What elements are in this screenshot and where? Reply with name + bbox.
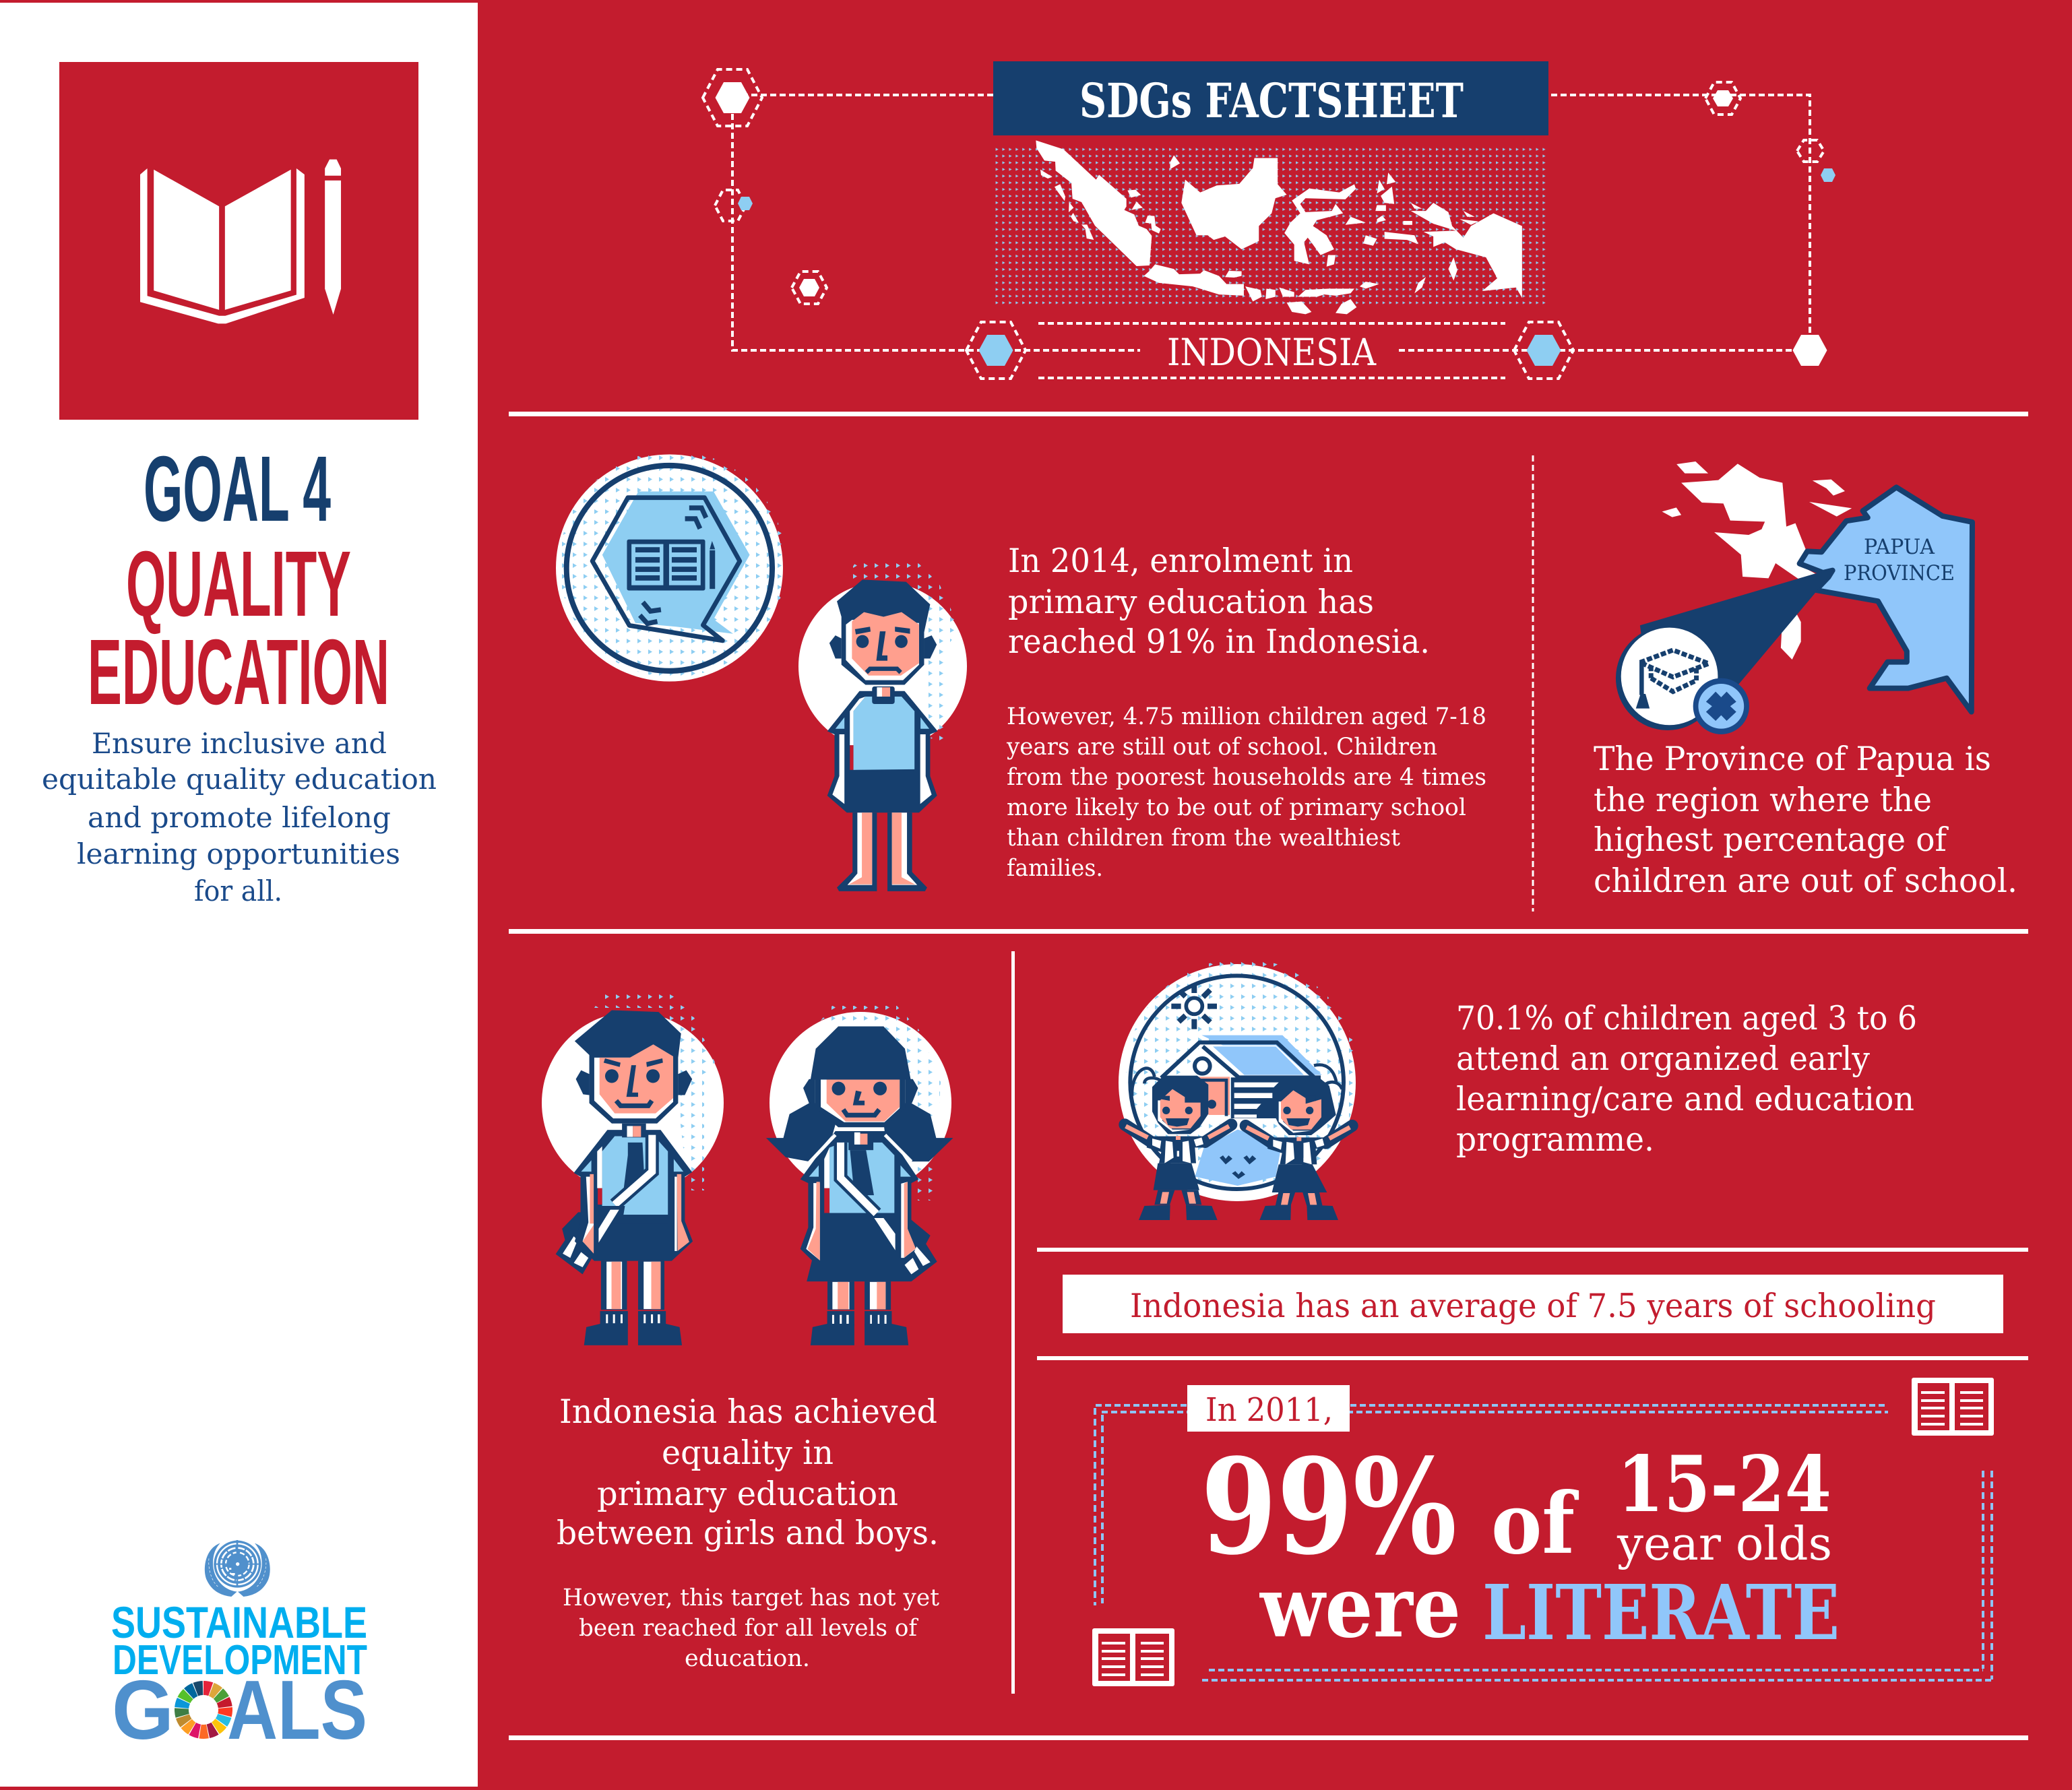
heading: education: EDUCATION (88, 620, 389, 724)
stat: 99% of 15-24 year olds were literate: of (1491, 1475, 1579, 1573)
text: out of school detail: from the poorest households are 4 times (1007, 764, 1486, 791)
text: papua statement: The Province of Papua is (1594, 740, 1991, 778)
text: early learning statement: learning/care and education (1456, 1080, 1914, 1118)
text: out of school detail: families. (1007, 855, 1103, 882)
text: papua statement: highest percentage of (1594, 821, 1949, 859)
text: equality detail (563, 1585, 939, 1672)
text: equality detail: education. (685, 1645, 810, 1672)
bottom edge strip (0, 1787, 478, 1790)
text: goal description (42, 727, 437, 907)
text: enrolment headline: In 2014, enrolment in (1008, 542, 1353, 580)
panel: left sidebar (0, 3, 478, 1787)
text: equality headline (557, 1393, 939, 1552)
text: papua statement (1594, 740, 2017, 900)
illustration: schoolboy with satchel (542, 992, 724, 1345)
stat: 99% of 15-24 year olds were literate: 15-24 (1617, 1439, 1831, 1529)
text: equality headline: primary education (597, 1475, 898, 1513)
title bar: sdgs factsheet: SDGs FACTSHEET (1079, 73, 1464, 129)
text: goal description: equitable quality education (42, 763, 437, 796)
label: indonesia: INDONESIA (1167, 331, 1377, 374)
text: goal description: and promote lifelong (88, 801, 391, 834)
logo: sustainable development goals: G (112, 1664, 174, 1757)
text: enrolment headline: primary education has (1008, 583, 1374, 621)
logo: sustainable development goals: SUSTAINABLE (111, 1597, 367, 1647)
label: in 2011 (1187, 1385, 1350, 1432)
header: dashed frame with hexagons (703, 69, 1835, 379)
stat: 99% of 15-24 year olds were literate: year olds (1616, 1518, 1832, 1571)
text: out of school detail: years are still out of school. Children (1006, 734, 1437, 761)
icon: book top right (1912, 1378, 1994, 1436)
title bar: sdgs factsheet (993, 61, 1548, 135)
stat: 99% of 15-24 year olds were literate: 99% (1201, 1430, 1457, 1584)
logo: sustainable development goals: ALS (227, 1664, 367, 1757)
heading: quality: QUALITY (126, 532, 351, 636)
text: equality headline: Indonesia has achieved (559, 1393, 937, 1431)
text: out of school detail: However, 4.75 million children aged 7-18 (1007, 703, 1486, 730)
text: early learning statement: attend an organized early (1456, 1040, 1870, 1078)
text: equality headline: between girls and boys. (557, 1514, 939, 1552)
stat: 99% of 15-24 year olds were literate (1201, 1430, 1840, 1657)
text: out of school detail (1006, 703, 1486, 882)
illustration: children in front of school (1119, 959, 1358, 1220)
logo: sustainable development goals (111, 1540, 367, 1757)
icon: goal 4 book and pencil tile (59, 62, 418, 420)
text: papua statement: children are out of school. (1594, 862, 2017, 900)
icon: speech bubble with book (556, 451, 786, 682)
text: early learning statement (1456, 999, 1917, 1159)
map: indonesia (995, 140, 1547, 314)
text: goal description: for all. (194, 874, 282, 907)
text: goal description: learning opportunities (77, 837, 400, 870)
text: enrolment headline: reached 91% in Indonesia. (1008, 622, 1430, 661)
text: out of school detail: more likely to be out of primary school (1007, 794, 1466, 821)
text: early learning statement: programme. (1456, 1120, 1654, 1159)
map: papua province callout (1616, 461, 1972, 734)
logo: sustainable development goals: DEVELOPMENT (113, 1637, 367, 1684)
text: equality detail: been reached for all levels of (579, 1615, 919, 1642)
text: equality detail: However, this target has not yet (563, 1585, 939, 1611)
illustration: sad boy (798, 561, 967, 891)
text: early learning statement: 70.1% of children aged 3 to 6 (1456, 999, 1917, 1037)
section dividers (509, 412, 2028, 1740)
illustration: schoolgirl with satchel (766, 1006, 953, 1345)
map: papua province callout: PROVINCE (1844, 561, 1955, 585)
map: papua province callout: PAPUA (1864, 535, 1935, 559)
text: goal description: Ensure inclusive and (92, 727, 387, 760)
callout: years of schooling (1063, 1275, 2003, 1333)
literacy panel frame (1095, 1405, 1992, 1680)
icon: book bottom left (1092, 1628, 1174, 1686)
text: enrolment headline (1008, 542, 1430, 661)
text: papua statement: the region where the (1594, 781, 1932, 819)
stat: 99% of 15-24 year olds were literate: LITERATE (1482, 1569, 1840, 1657)
text: equality headline: equality in (662, 1434, 834, 1472)
heading: goal 4: GOAL 4 (144, 437, 331, 541)
callout: years of schooling: Indonesia has an average of 7.5 years of schooling (1130, 1287, 1936, 1325)
stat: 99% of 15-24 year olds were literate: were (1259, 1558, 1461, 1657)
label: in 2011: In 2011, (1205, 1391, 1333, 1429)
text: out of school detail: than children from the wealthiest (1007, 825, 1400, 852)
